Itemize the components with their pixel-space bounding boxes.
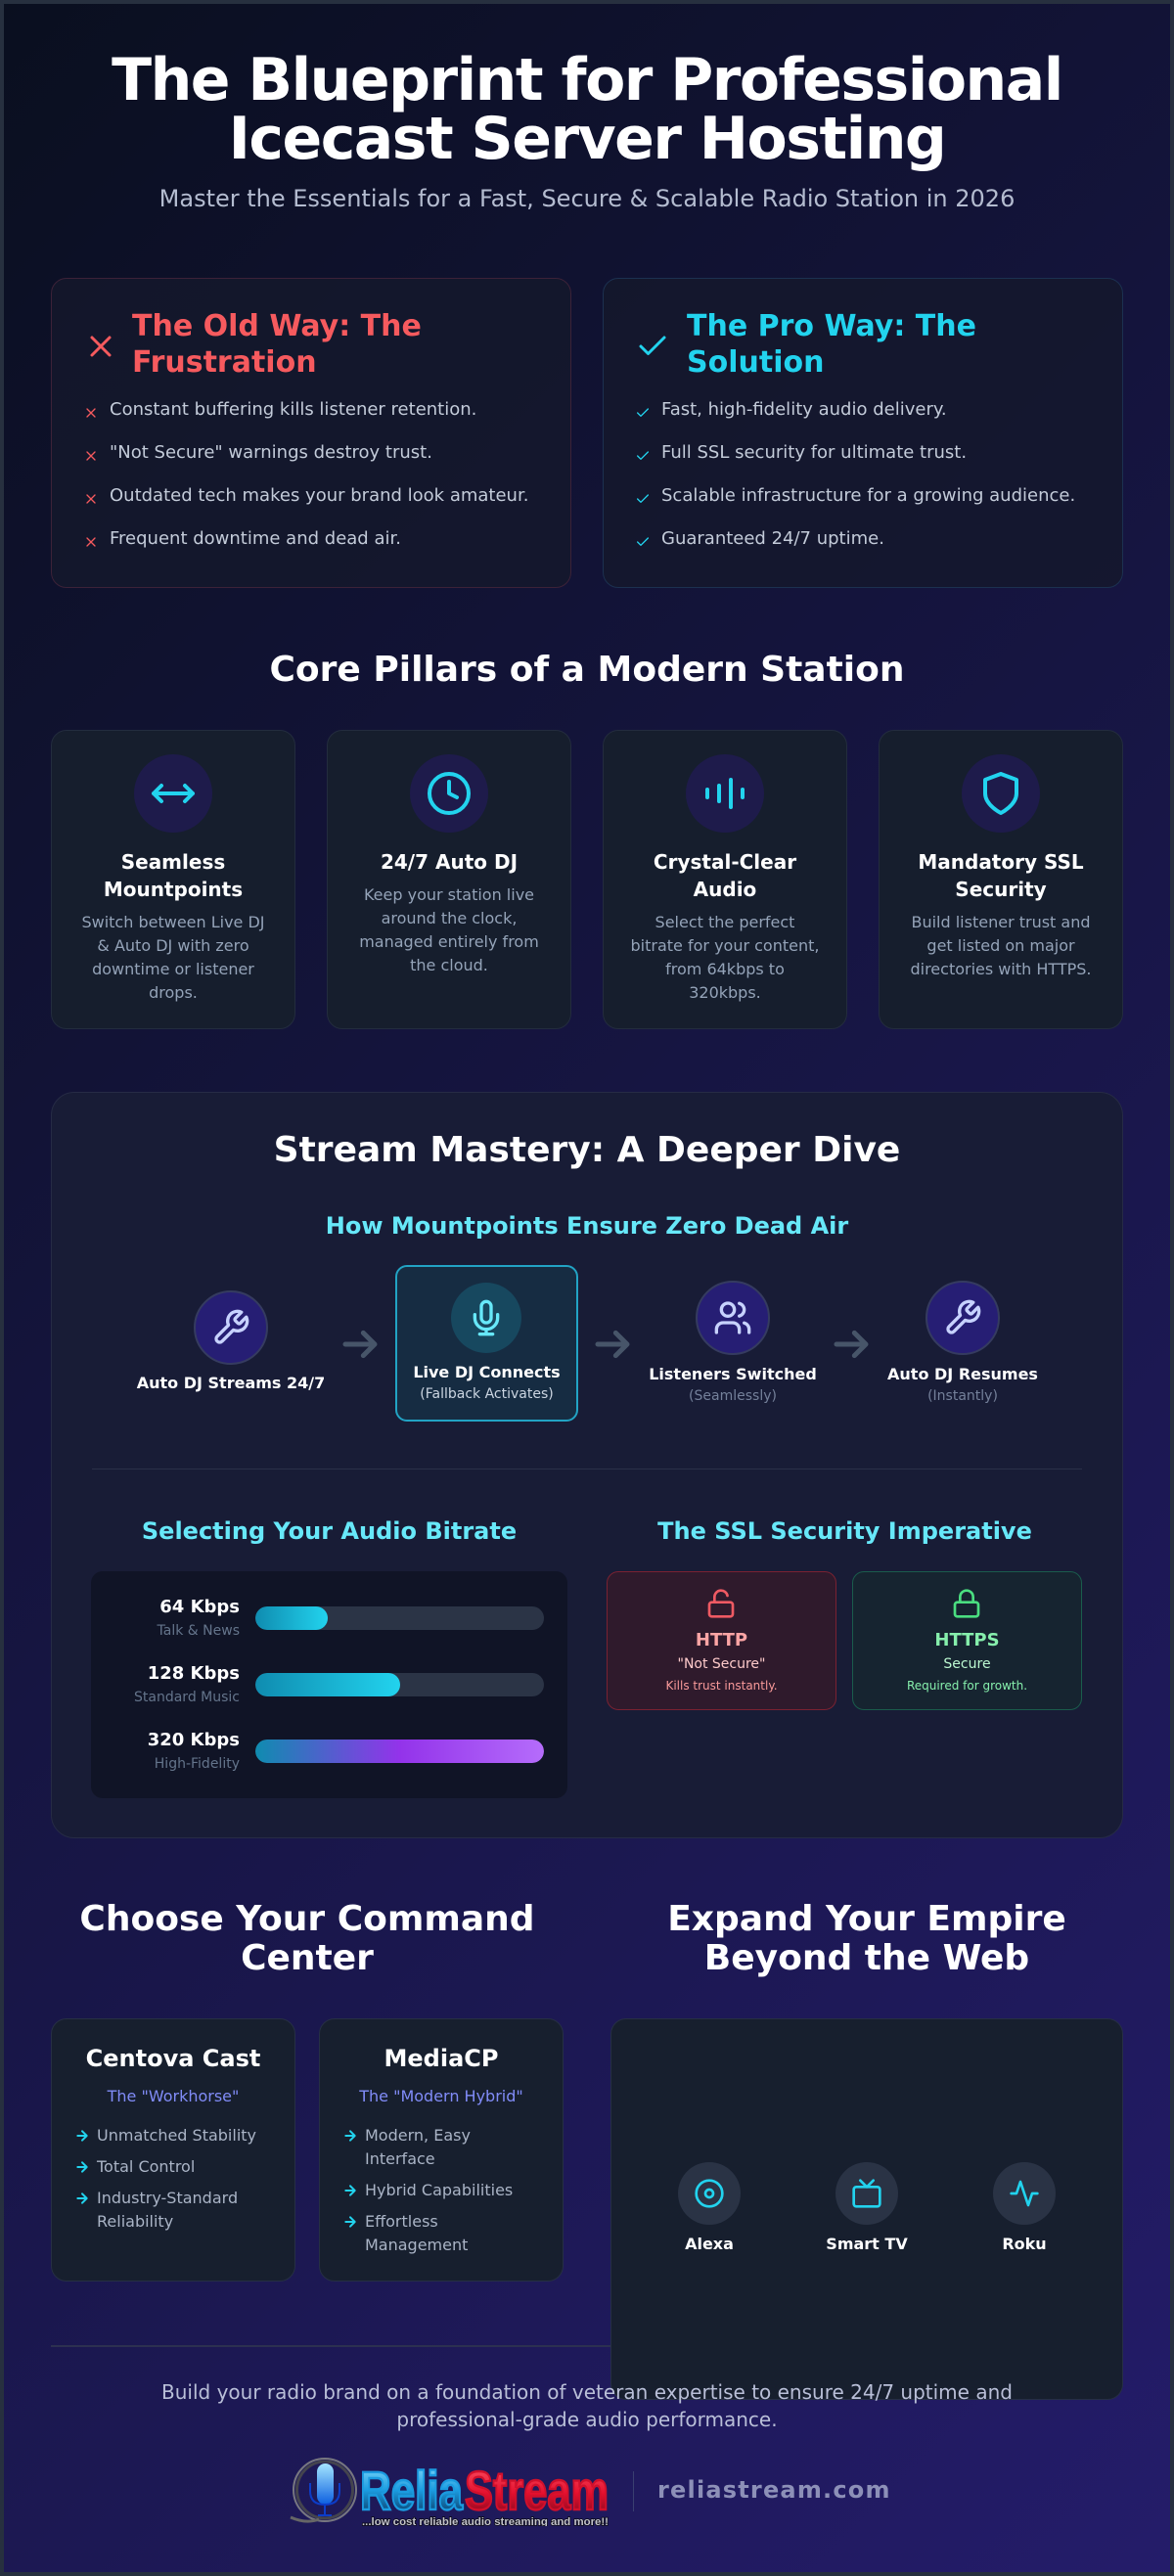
panel: stream mastery — [51, 1092, 1123, 1838]
row: 320 kbps: High-Fidelity — [155, 1756, 240, 1772]
flow step: auto dj resumes — [887, 1281, 1038, 1404]
heading: expand: Expand Your Empire Beyond the Web — [667, 1899, 1066, 1978]
icon: microphone — [451, 1283, 521, 1353]
logo: reliastream: Relia — [360, 2460, 464, 2521]
footer text — [161, 2380, 1013, 2431]
row: 320 kbps: 320 Kbps — [148, 1730, 240, 1750]
flow step: listeners switched: (Seamlessly) — [689, 1388, 777, 1404]
item: Fast, high-fidelity audio delivery. — [661, 399, 947, 420]
item — [344, 2212, 468, 2254]
item — [344, 2126, 471, 2168]
item: Full SSL security for ultimate trust. — [661, 442, 967, 463]
item — [76, 2189, 238, 2231]
logo: reliastream — [290, 2458, 609, 2526]
pillar: mandatory ssl — [879, 730, 1123, 1029]
item: Constant buffering kills listener retention. — [110, 399, 476, 420]
item: Total Control — [97, 2157, 195, 2176]
flow step: live dj connects — [395, 1265, 578, 1422]
card: http: Kills trust instantly. — [665, 1679, 778, 1693]
row: 64 kbps: 64 Kbps — [159, 1597, 240, 1617]
row: 64 kbps — [157, 1597, 544, 1639]
panel: mediacp: The "Modern Hybrid" — [359, 2087, 523, 2105]
pillar: mandatory ssl: Mandatory SSL Security — [918, 850, 1084, 901]
panel: mediacp — [319, 2018, 564, 2282]
pillar: crystal-clear audio — [603, 730, 847, 1029]
item: Effortless — [365, 2212, 438, 2231]
panel: the pro way — [603, 278, 1123, 588]
pillar: seamless mountpoints: Seamless Mountpoints — [104, 850, 243, 901]
icon: shield — [962, 754, 1040, 833]
panel: centova cast — [51, 2018, 295, 2282]
arrow — [595, 1331, 630, 1358]
flow step: listeners switched — [649, 1281, 817, 1404]
flow step: live dj connects: Live DJ Connects — [413, 1363, 561, 1381]
footer text: professional-grade audio performance. — [396, 2408, 778, 2431]
pillar: auto dj: Keep your station live around the clock, managed entirely from the cloud. — [359, 885, 539, 974]
pillar: crystal-clear audio: Select the perfect bitrate for your content, from 64kbps to 320kbps. — [631, 913, 819, 1002]
flow step: auto dj resumes: Auto DJ Resumes — [887, 1365, 1038, 1383]
card: https: HTTPS — [934, 1630, 1000, 1650]
icon: users — [696, 1281, 770, 1355]
icon: disc — [678, 2162, 741, 2225]
pillar: auto dj — [327, 730, 571, 1029]
flow step: auto dj streams — [137, 1290, 325, 1392]
row: 128 kbps: 128 Kbps — [148, 1663, 240, 1684]
row: 128 kbps: Standard Music — [134, 1690, 240, 1705]
icon: wrench — [194, 1290, 268, 1365]
item: "Not Secure" warnings destroy trust. — [110, 442, 432, 463]
panel: centova cast: The "Workhorse" — [108, 2087, 239, 2105]
flow step: auto dj streams: Auto DJ Streams 24/7 — [137, 1374, 325, 1392]
heading: bitrate: Selecting Your Audio Bitrate — [142, 1517, 517, 1545]
pillar: seamless mountpoints — [51, 730, 295, 1029]
card: https: Secure — [943, 1656, 991, 1672]
heading: old way: The Old Way: The Frustration — [132, 309, 422, 380]
title: The Blueprint for Professional — [112, 46, 1062, 114]
card: http: "Not Secure" — [677, 1656, 765, 1672]
pillar: seamless mountpoints: Switch between Live DJ & Auto DJ with zero downtime or listener drops. — [81, 913, 265, 1002]
item: Unmatched Stability — [97, 2126, 256, 2145]
heading: pro way: The Pro Way: The Solution — [687, 309, 976, 380]
item: Interface — [365, 2149, 435, 2168]
pillar: mandatory ssl: Build listener trust and get listed on major directories with HTTPS. — [910, 913, 1092, 978]
title: Icecast Server Hosting — [229, 105, 945, 173]
platform: smart tv: Smart TV — [826, 2235, 908, 2253]
arrow — [342, 1331, 378, 1358]
panel: centova cast: Centova Cast — [86, 2045, 260, 2072]
item: Guaranteed 24/7 uptime. — [661, 528, 884, 549]
card: http: HTTP — [696, 1630, 747, 1650]
pillar: auto dj: 24/7 Auto DJ — [381, 850, 518, 874]
item: Outdated tech makes your brand look amateur. — [110, 485, 528, 506]
item: Management — [365, 2236, 468, 2254]
flow step: auto dj resumes: (Instantly) — [927, 1388, 998, 1404]
footer url: reliastream.com — [657, 2476, 891, 2504]
icon: move horizontal — [134, 754, 212, 833]
panel: the old way — [51, 278, 571, 588]
card: http — [607, 1571, 836, 1710]
subtitle: Master the Essentials for a Fast, Secure & Scalable Radio Station in 2026 — [159, 185, 1015, 212]
card: https — [852, 1571, 1082, 1710]
icon: cyan check — [639, 336, 666, 356]
heading: core pillars: Core Pillars of a Modern Station — [269, 650, 905, 690]
platform: smart tv — [826, 2162, 908, 2253]
icon: red x — [90, 336, 112, 357]
row: 128 kbps — [134, 1663, 544, 1705]
platform: roku — [993, 2162, 1056, 2253]
icon: clock — [410, 754, 488, 833]
heading: mountpoints: How Mountpoints Ensure Zero Dead Air — [326, 1212, 848, 1240]
platform: alexa: Alexa — [685, 2235, 734, 2253]
pillar: crystal-clear audio: Crystal-Clear Audio — [654, 850, 796, 901]
item: Reliability — [97, 2212, 173, 2231]
item: Hybrid Capabilities — [365, 2181, 513, 2199]
icon: wrench — [926, 1281, 1000, 1355]
item: Industry-Standard — [97, 2189, 238, 2207]
item: Scalable infrastructure for a growing audience. — [661, 485, 1075, 506]
platform: alexa — [678, 2162, 741, 2253]
item: Frequent downtime and dead air. — [110, 528, 401, 549]
heading: stream mastery: Stream Mastery: A Deeper Dive — [274, 1130, 900, 1170]
arrow — [834, 1331, 869, 1358]
panel: mediacp: MediaCP — [384, 2045, 498, 2072]
icon: audio bars — [686, 754, 764, 833]
row: 64 kbps: Talk & News — [158, 1623, 240, 1639]
icon: activity — [993, 2162, 1056, 2225]
flow step: live dj connects: (Fallback Activates) — [420, 1386, 554, 1402]
icon: tv — [835, 2162, 898, 2225]
panel: platforms — [610, 2018, 1123, 2400]
item: Modern, Easy — [365, 2126, 471, 2145]
icon: open lock — [708, 1589, 734, 1618]
heading: ssl: The SSL Security Imperative — [657, 1517, 1032, 1545]
chart: audio bitrate bars — [91, 1571, 567, 1798]
flow step: listeners switched: Listeners Switched — [649, 1365, 817, 1383]
heading: command center: Choose Your Command Center — [79, 1899, 535, 1978]
title — [112, 46, 1062, 173]
row: 320 kbps — [148, 1730, 544, 1772]
card: https: Required for growth. — [907, 1679, 1027, 1693]
icon: closed lock — [953, 1589, 980, 1618]
footer text: Build your radio brand on a foundation of veteran expertise to ensure 24/7 uptime and — [161, 2380, 1013, 2404]
platform: roku: Roku — [1002, 2235, 1047, 2253]
